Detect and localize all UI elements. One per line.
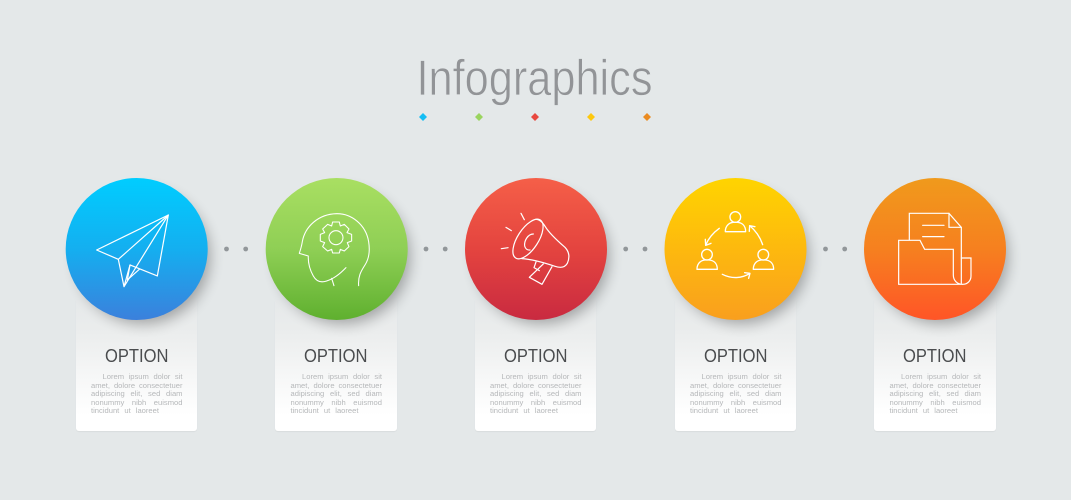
- body text: [91, 372, 182, 415]
- icon: folder with document: [899, 213, 971, 284]
- card 1: nonummy nibh euismod: [91, 398, 182, 406]
- circle 3 shadow and disc: [465, 178, 609, 324]
- card 4: nonummy nibh euismod: [690, 398, 782, 406]
- icon: megaphone: [501, 213, 569, 284]
- circle 5 shadow and disc: [864, 178, 1008, 324]
- card 4: amet, dolore consectetuer: [690, 380, 782, 390]
- card 3: nonummy nibh euismod: [490, 398, 582, 406]
- title: Infographics: [416, 50, 652, 106]
- heading: OPTION: [903, 346, 966, 366]
- card 4: Lorem ipsum dolor sit: [702, 372, 782, 381]
- card 5: tincidunt ut laoreet: [890, 406, 958, 415]
- card 4: tincidunt ut laoreet: [690, 406, 758, 415]
- body text: [690, 372, 782, 415]
- card 2: amet, dolore consectetuer: [290, 380, 382, 390]
- title diamonds: [419, 113, 651, 121]
- heading: OPTION: [304, 346, 367, 366]
- card 5: [874, 300, 996, 431]
- card 5: amet, dolore consectetuer: [890, 380, 981, 390]
- card 5: nonummy nibh euismod: [890, 398, 981, 406]
- card 2: Lorem ipsum dolor sit: [302, 372, 382, 381]
- card 2: [275, 300, 396, 431]
- icon: head with gear: [299, 214, 369, 286]
- card 1: amet, dolore consectetuer: [91, 380, 182, 390]
- card 2: nonummy nibh euismod: [290, 398, 382, 406]
- card 1: adipiscing elit, sed diam: [91, 389, 182, 398]
- body text: [890, 372, 981, 415]
- card 1: Lorem ipsum dolor sit: [102, 372, 182, 381]
- circle 4 shadow and disc: [664, 178, 808, 324]
- card 1: tincidunt ut laoreet: [91, 406, 159, 415]
- card 4: [674, 300, 796, 431]
- card 4: adipiscing elit, sed diam: [690, 389, 782, 398]
- body text: [290, 372, 382, 415]
- card 3: tincidunt ut laoreet: [490, 406, 558, 415]
- icon: paper plane: [97, 215, 168, 287]
- card 5: Lorem ipsum dolor sit: [901, 372, 981, 381]
- card 1: [76, 300, 197, 431]
- circle 2 shadow and disc: [266, 178, 410, 324]
- icon: team cycle: [697, 212, 774, 278]
- card 5: adipiscing elit, sed diam: [890, 389, 981, 398]
- heading: OPTION: [503, 346, 567, 366]
- connector dots: [224, 247, 847, 251]
- card 3: Lorem ipsum dolor sit: [502, 372, 582, 381]
- card 3: amet, dolore consectetuer: [490, 380, 582, 390]
- heading: OPTION: [104, 346, 168, 366]
- heading: OPTION: [703, 346, 767, 366]
- card 3: [474, 300, 596, 431]
- body text: [490, 372, 582, 415]
- card 2: tincidunt ut laoreet: [290, 406, 358, 415]
- circle 1 shadow and disc: [66, 178, 210, 324]
- card 2: adipiscing elit, sed diam: [290, 389, 382, 398]
- card 3: adipiscing elit, sed diam: [490, 389, 582, 398]
